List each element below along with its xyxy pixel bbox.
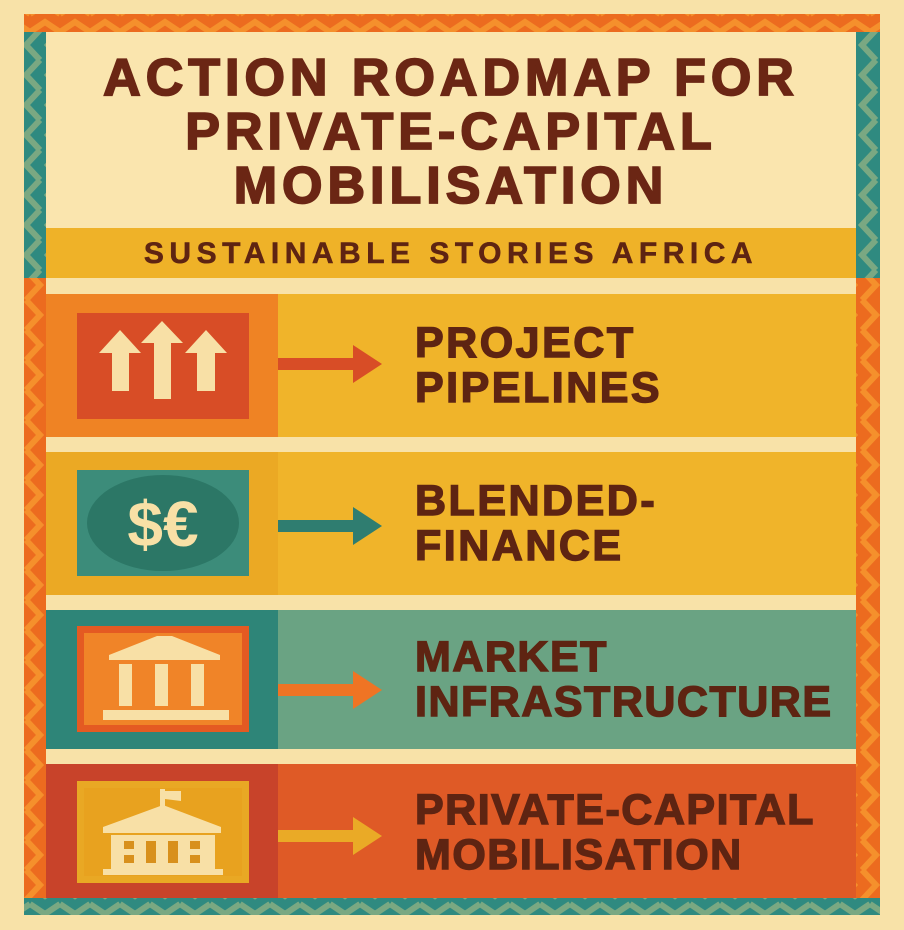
label: BLENDED- xyxy=(415,477,657,525)
label xyxy=(415,319,662,412)
subtitle band xyxy=(46,228,856,278)
icon: currency: $€ xyxy=(127,488,199,560)
row 1: project pipelines xyxy=(46,294,856,437)
border: top xyxy=(24,14,880,32)
title panel xyxy=(46,32,856,228)
arrow xyxy=(278,817,382,855)
icon: currency xyxy=(77,470,249,576)
label xyxy=(415,633,833,726)
arrow xyxy=(278,507,382,545)
title: ACTION ROADMAP FOR xyxy=(103,49,799,107)
arrow xyxy=(278,671,382,709)
icon: arrows up xyxy=(77,313,249,419)
label: PRIVATE-CAPITAL xyxy=(415,786,815,834)
label: INFRASTRUCTURE xyxy=(415,678,833,726)
title xyxy=(103,49,799,215)
title: PRIVATE-CAPITAL xyxy=(185,103,717,161)
border: left orange xyxy=(24,278,46,898)
row 2: blended finance xyxy=(46,452,856,595)
title: MOBILISATION xyxy=(234,157,668,215)
label: FINANCE xyxy=(415,522,624,570)
label: MOBILISATION xyxy=(415,831,743,879)
label: PROJECT xyxy=(415,319,636,367)
label xyxy=(415,786,815,879)
row 4: private-capital mobilisation xyxy=(46,764,856,898)
label: PIPELINES xyxy=(415,364,662,412)
border: right teal xyxy=(856,32,880,278)
border: right orange xyxy=(856,278,880,898)
border: left teal xyxy=(24,32,46,278)
label: MARKET xyxy=(415,633,608,681)
arrow xyxy=(278,345,382,383)
border: bottom xyxy=(24,898,880,915)
label xyxy=(415,477,657,570)
icon: building xyxy=(77,781,249,883)
icon: bank xyxy=(77,626,249,732)
subtitle band: SUSTAINABLE STORIES AFRICA xyxy=(144,237,758,270)
row 3: market infrastructure xyxy=(46,610,856,749)
